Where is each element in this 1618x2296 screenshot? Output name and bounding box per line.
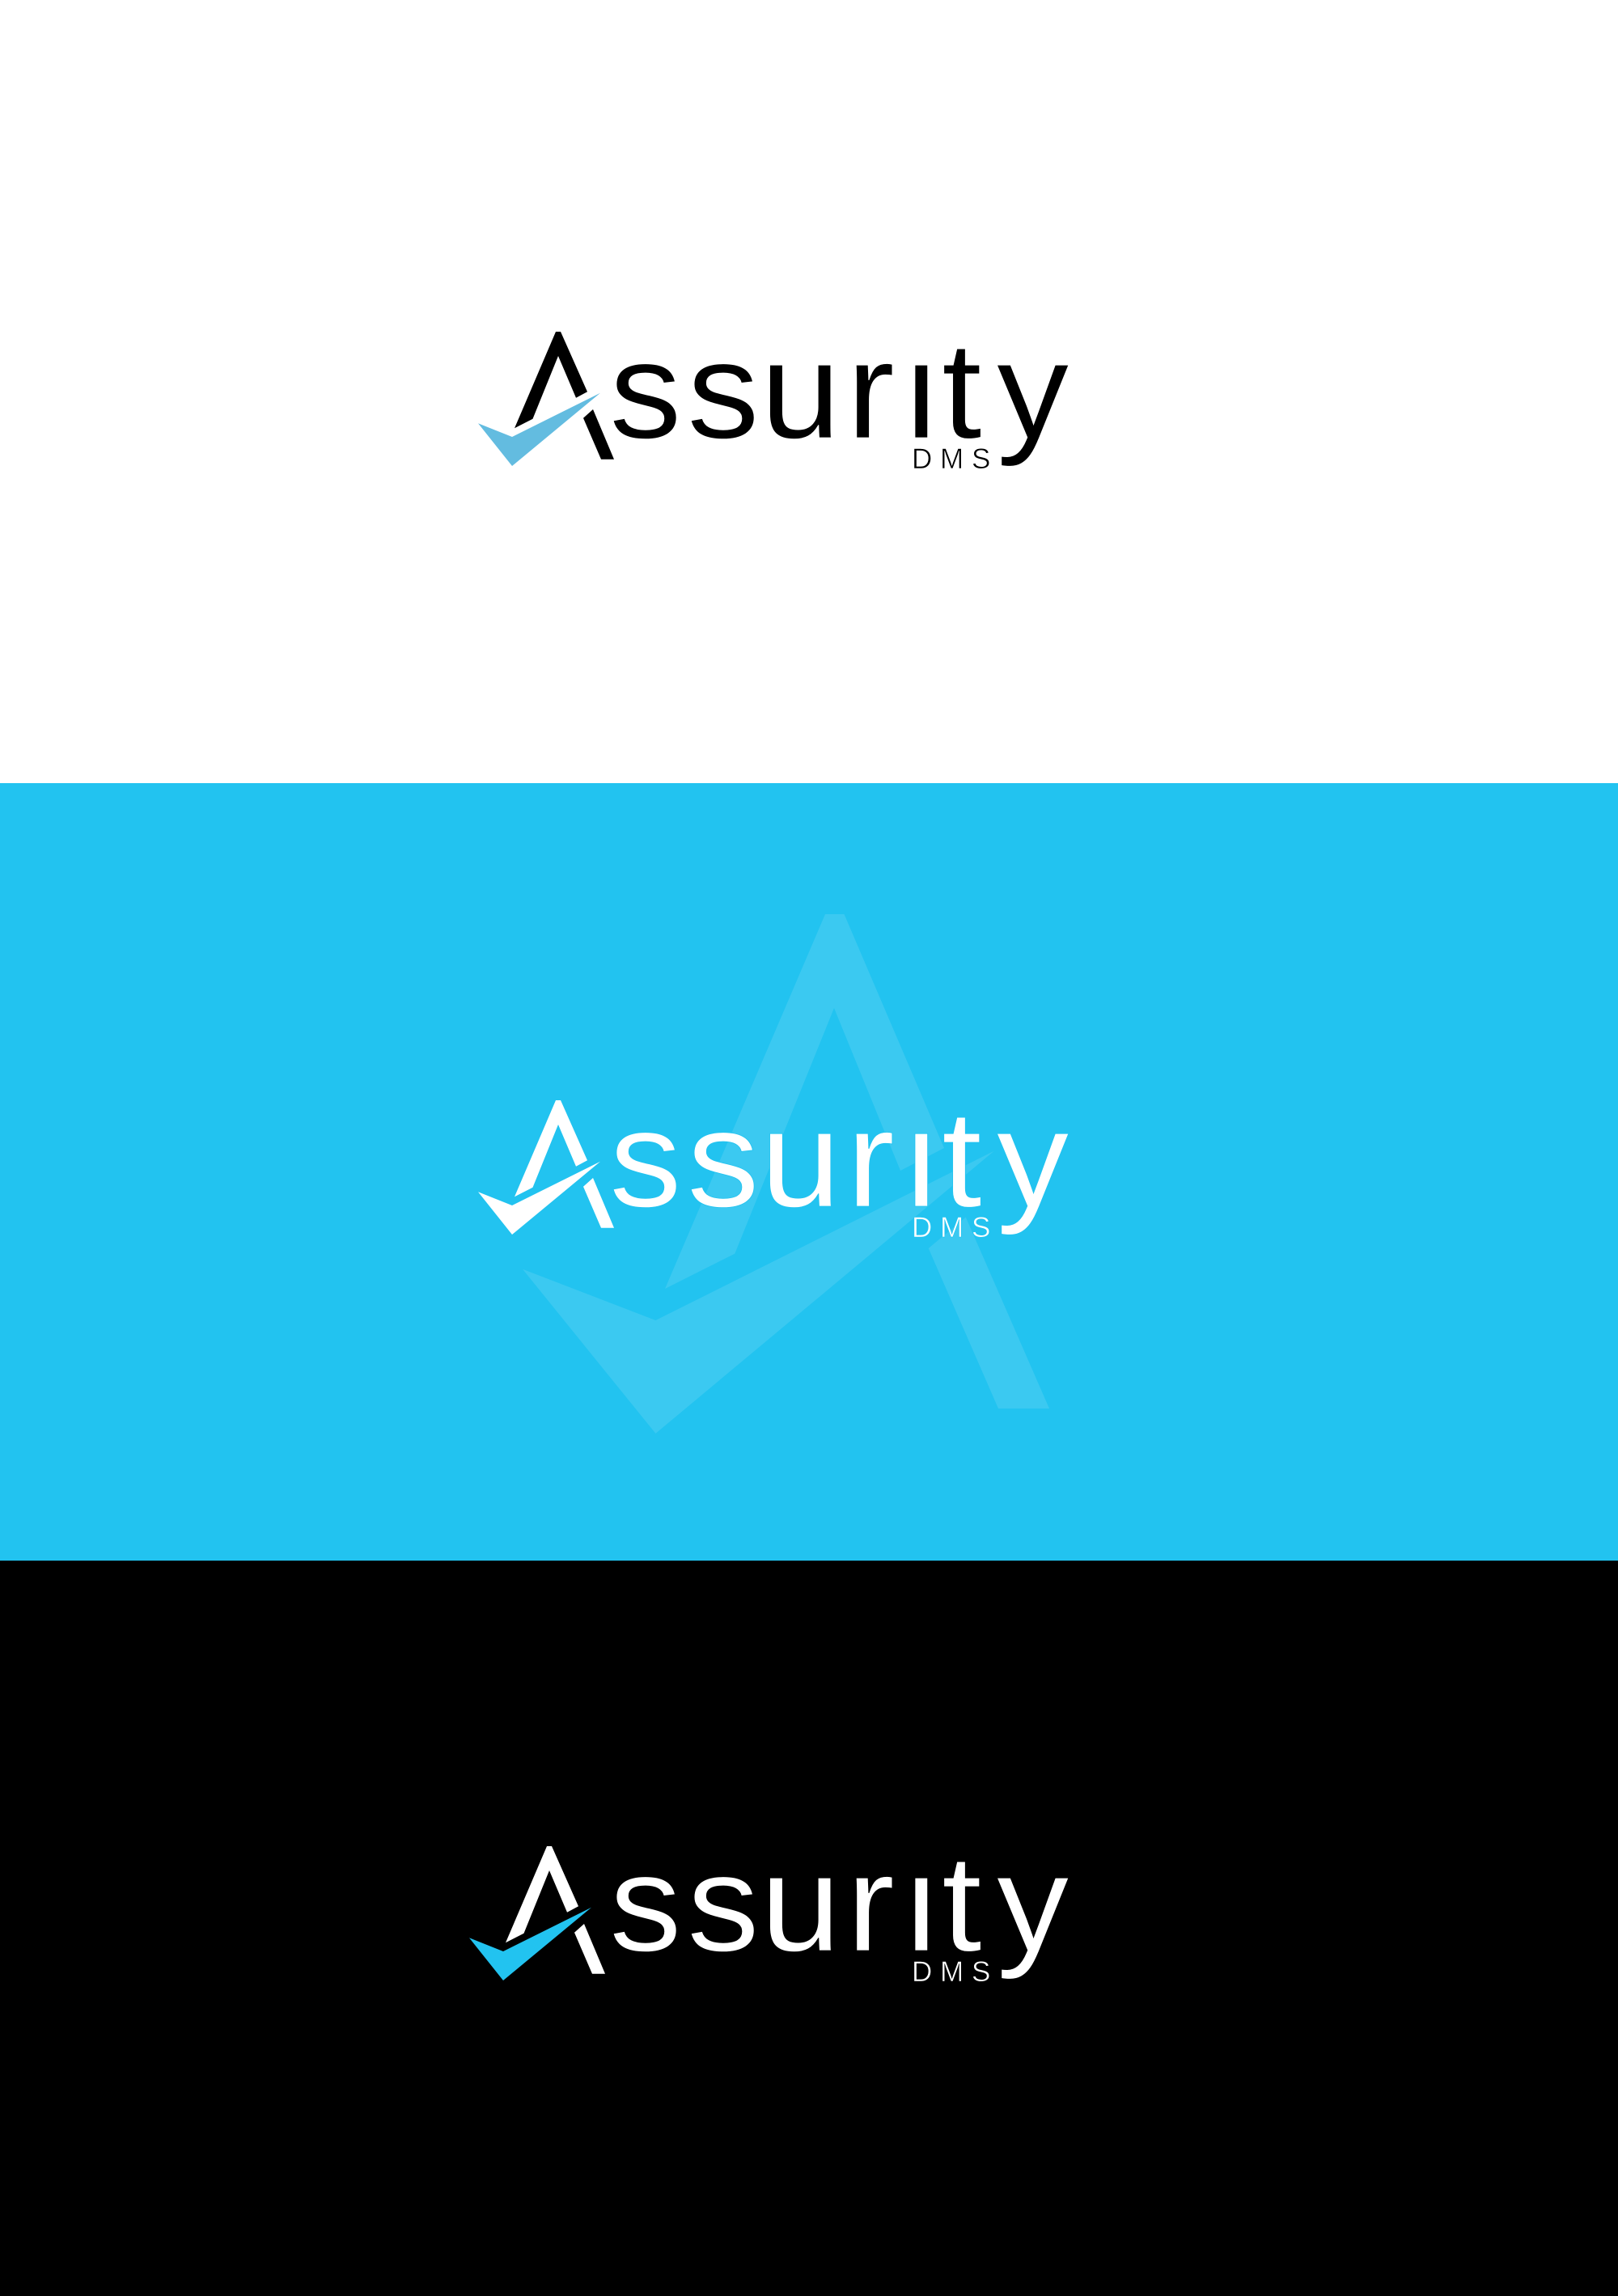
logo: white on cyan bbox=[478, 1082, 1069, 1243]
wordmark: ssurıty bbox=[609, 1082, 1069, 1235]
watermark: large faded A and check mark bbox=[523, 914, 1049, 1434]
tagline: DMS: DMS bbox=[912, 443, 990, 475]
wordmark: ssurıty bbox=[609, 313, 1069, 467]
panel: black background bbox=[0, 1561, 1618, 2296]
icon: white letter A with cyan check mark bbox=[469, 1846, 605, 1980]
tagline: DMS: DMS bbox=[912, 1956, 990, 1988]
panel: white background bbox=[0, 0, 1618, 783]
panel: cyan background bbox=[0, 783, 1618, 1561]
logo: white and cyan on black bbox=[469, 1826, 1069, 1988]
icon: letter A with blue check mark bbox=[478, 332, 614, 466]
tagline: DMS: DMS bbox=[912, 1212, 990, 1243]
icon: white letter A with white check mark bbox=[478, 1100, 614, 1235]
logo: black on white bbox=[478, 313, 1069, 475]
wordmark: ssurıty bbox=[609, 1826, 1069, 1980]
